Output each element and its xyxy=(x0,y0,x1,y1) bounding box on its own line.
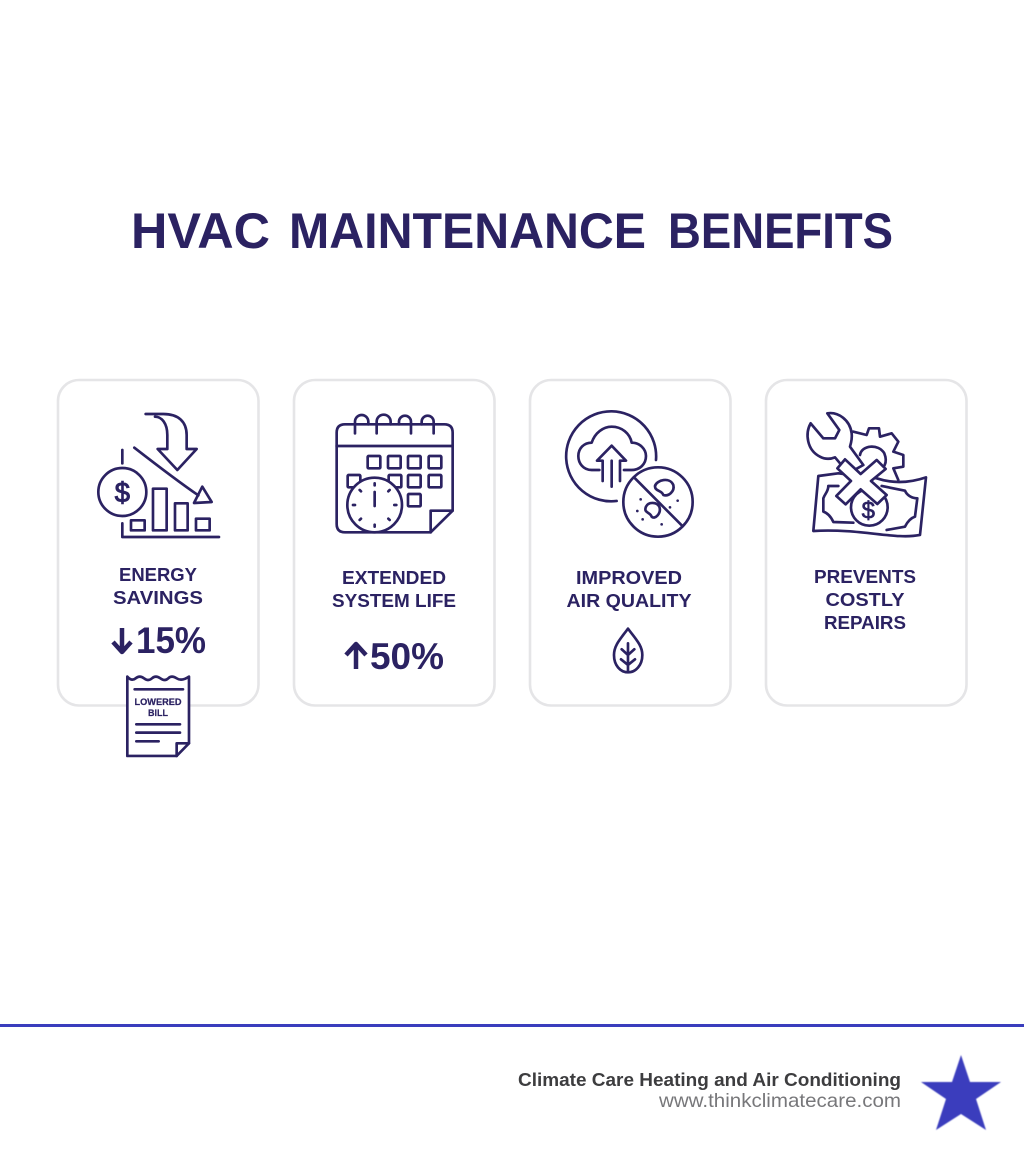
company name: Climate Care Heating and Air Conditioning xyxy=(518,1069,901,1090)
label: energy savings: SAVINGS xyxy=(113,587,203,608)
label: prevents costly repairs xyxy=(814,566,916,633)
icon: wrench, gear, cancelled money xyxy=(808,413,926,536)
title: MAINTENANCE xyxy=(289,203,646,259)
label: prevents costly repairs: PREVENTS xyxy=(814,566,916,587)
title: BENEFITS xyxy=(668,203,893,259)
label: prevents costly repairs: COSTLY xyxy=(826,589,905,610)
title: HVAC xyxy=(131,203,270,259)
icon: star logo xyxy=(921,1055,1001,1130)
icon: falling costs chart: $ xyxy=(115,477,130,508)
label: prevents costly repairs: REPAIRS xyxy=(824,612,906,633)
card outline: prevents costly repairs xyxy=(766,380,966,706)
panel: improved air quality xyxy=(530,380,730,706)
icon: lowered bill receipt: BILL xyxy=(148,708,168,718)
label: improved air quality: IMPROVED xyxy=(576,567,682,588)
label: extended system life: SYSTEM LIFE xyxy=(332,590,456,611)
icon: leaf xyxy=(614,629,642,672)
icon: lowered bill receipt xyxy=(127,677,189,756)
icon: calendar and clock xyxy=(337,415,453,532)
icon: lowered bill receipt: LOWERED xyxy=(134,697,182,707)
label: improved air quality: AIR QUALITY xyxy=(566,590,692,611)
icon: wrench, gear, cancelled money: $ xyxy=(862,497,875,524)
panel: extended system life xyxy=(294,380,494,706)
label: energy savings: ENERGY xyxy=(119,564,198,585)
card outline: energy savings xyxy=(58,380,258,706)
stat: down 15 percent: 15% xyxy=(136,620,206,661)
panel: energy savings xyxy=(58,380,258,756)
label: extended system life xyxy=(332,567,456,611)
title xyxy=(131,203,893,259)
footer xyxy=(0,1024,1024,1130)
stat: up 50 percent: 50% xyxy=(370,636,444,677)
website: www.thinkclimatecare.com xyxy=(658,1090,901,1112)
icon: clean air cloud and blocked particles xyxy=(566,411,693,537)
panel: prevents costly repairs xyxy=(766,380,966,706)
label: energy savings xyxy=(113,564,203,608)
card outline: improved air quality xyxy=(530,380,730,706)
label: improved air quality xyxy=(566,567,692,611)
icon: falling costs chart xyxy=(98,414,219,537)
card outline: extended system life xyxy=(294,380,494,706)
label: extended system life: EXTENDED xyxy=(342,567,446,588)
